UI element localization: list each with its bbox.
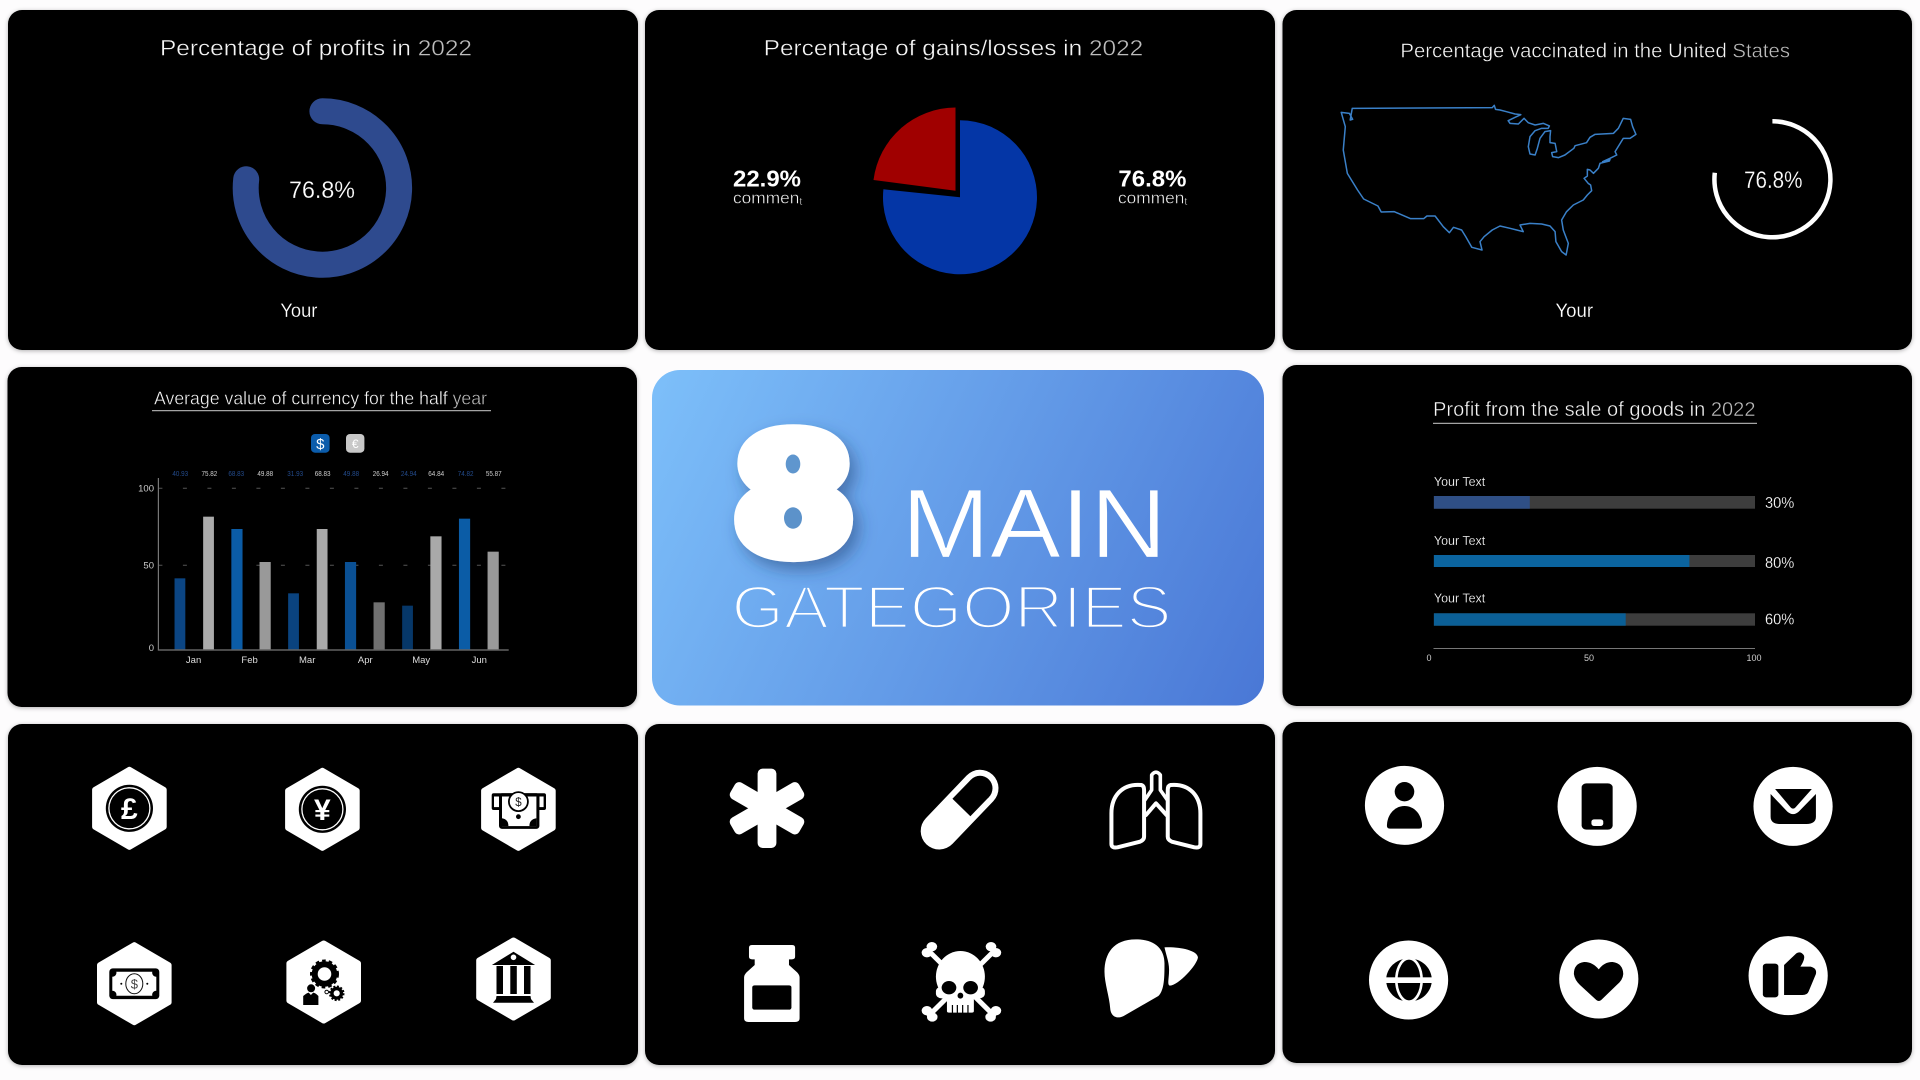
x axis labels: Mar — [299, 655, 315, 666]
x axis labels — [186, 655, 487, 666]
x axis: 50 — [1584, 653, 1594, 663]
panel: vaccinated in the United States — [1282, 10, 1912, 350]
bar values — [172, 469, 502, 478]
x axis labels: Apr — [358, 655, 373, 666]
icon: liver — [1104, 939, 1198, 1017]
icon: phone — [1558, 767, 1637, 846]
title: percentage of profits: Percentage of profits in 2022 — [160, 36, 472, 61]
stat: gains: 76.8% — [1118, 166, 1186, 192]
panel: contact icons — [1282, 722, 1912, 1063]
icon: star of life — [728, 769, 806, 848]
legend: dollar: $ — [316, 436, 325, 453]
icon: user — [1365, 766, 1444, 845]
y axis labels: 50 — [143, 560, 154, 572]
x axis: 0 — [1426, 653, 1432, 663]
icon: globe — [1369, 940, 1448, 1019]
x axis labels: May — [412, 655, 430, 666]
panel: finance icons — [8, 724, 638, 1065]
panel: medical icons — [645, 724, 1275, 1065]
bar row: 80%: 80% — [1765, 555, 1794, 572]
stat: gains — [1118, 166, 1188, 208]
title: profit from sale: Profit from the sale of goods in 2022 — [1433, 399, 1755, 421]
stat: losses — [733, 166, 802, 208]
bar row: 60% — [1434, 590, 1794, 628]
bar values: 68.83 — [315, 469, 330, 478]
bar values: 24.94 — [401, 469, 417, 478]
stat: gains: commen — [1118, 188, 1183, 208]
x axis labels: Jun — [472, 655, 487, 666]
bar values: 74.82 — [458, 469, 474, 478]
panel: gains and losses — [645, 10, 1275, 350]
pie chart — [874, 108, 1037, 274]
icon: banknote: $ — [131, 977, 139, 992]
bar row: 60%: Your Text — [1434, 590, 1486, 605]
caption: Your — [280, 301, 318, 322]
progress ring — [1714, 121, 1830, 237]
icon: cash machine: $ — [515, 797, 522, 809]
donut value: 76.8% — [289, 177, 355, 204]
bar row: 80% — [1434, 533, 1794, 572]
bar chart — [158, 478, 509, 650]
big number 8: 8 — [737, 397, 850, 589]
bar values: 75.82 — [202, 469, 217, 478]
x axis — [1426, 648, 1762, 663]
icon: pound coin: £ — [121, 793, 138, 826]
legend: euro — [346, 434, 364, 453]
bar values: 55.87 — [486, 469, 502, 478]
bar values: 26.94 — [373, 469, 388, 478]
bar row: 80%: Your Text — [1434, 533, 1486, 548]
panel: percentage of profits — [8, 10, 638, 350]
icon: yen coin — [288, 771, 357, 848]
icon: lungs — [1111, 772, 1200, 848]
caption: Your — [1556, 301, 1594, 322]
y axis labels: 0 — [149, 643, 154, 654]
icon: yen coin: ¥ — [314, 794, 331, 827]
stat: losses: 22.9% — [733, 166, 801, 192]
heading: GATEGORIES: GATEGORIES — [732, 574, 1172, 641]
icon: bank building — [479, 940, 548, 1018]
icon: cash machine — [484, 771, 553, 848]
bar values: 49.88 — [343, 469, 359, 478]
icon: heart — [1559, 939, 1638, 1018]
stat: losses: t — [799, 196, 802, 208]
donut chart — [246, 111, 399, 265]
y axis labels — [138, 484, 154, 654]
icon: skull and crossbones — [922, 942, 1001, 1022]
icon: medicine bottle — [744, 945, 800, 1022]
bar row: 30%: Your Text — [1434, 474, 1486, 489]
stat: gains: t — [1184, 196, 1188, 208]
y axis labels: 100 — [138, 484, 154, 494]
icon: capsule — [939, 776, 992, 831]
icon: banknote — [100, 945, 169, 1022]
title: vaccinated: Percentage vaccinated in the United States — [1400, 40, 1790, 62]
icon: pound coin — [95, 770, 164, 847]
bar values: 40.93 — [172, 469, 188, 478]
bar row: 60%: 60% — [1765, 611, 1794, 628]
panel: profit from sale of goods — [1282, 365, 1912, 706]
panel: 8 main categories — [652, 370, 1264, 706]
bar row: 30% — [1434, 474, 1794, 512]
bar values: 68.83 — [228, 469, 244, 478]
heading: MAIN: MAIN — [902, 468, 1167, 578]
bar row: 30%: 30% — [1765, 495, 1794, 512]
x axis labels: Jan — [186, 655, 201, 666]
icon: thumbs up — [1749, 936, 1828, 1015]
title: currency: Average value of currency for the half year — [154, 388, 487, 408]
legend: euro: € — [352, 437, 359, 451]
x axis labels: Feb — [241, 655, 258, 666]
ring value: 76.8% — [1744, 167, 1802, 194]
panel: average value of currency — [8, 367, 637, 707]
stat: losses: commen — [733, 188, 798, 208]
bar values: 64.84 — [428, 469, 444, 478]
icon: gears and person — [289, 944, 358, 1020]
title: gains and losses: Percentage of gains/losses in 2022 — [764, 36, 1143, 61]
x axis: 100 — [1746, 653, 1762, 663]
legend: dollar — [311, 434, 330, 453]
bar values: 31.93 — [287, 469, 303, 478]
icon: envelope — [1753, 767, 1833, 846]
bar values: 49.88 — [257, 469, 273, 478]
map: United States outline — [1341, 105, 1636, 255]
